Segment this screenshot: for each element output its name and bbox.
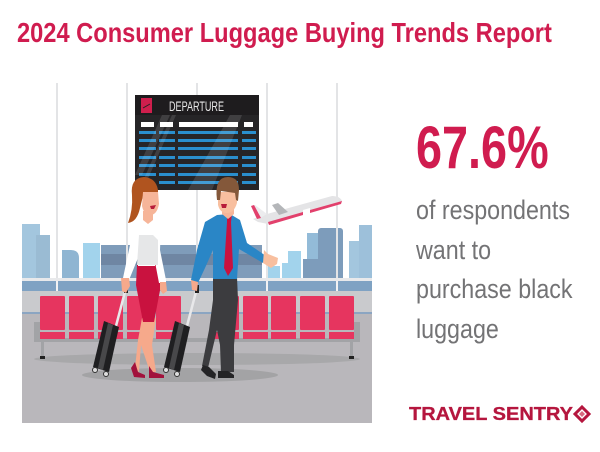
seat shadow <box>34 353 360 365</box>
man's suitcase <box>164 285 199 376</box>
description: purchase black <box>416 274 573 304</box>
description <box>416 195 573 344</box>
window frames <box>56 83 338 279</box>
airplane <box>251 196 342 225</box>
logo: Travel Sentry: TRAVEL SENTRY <box>409 403 574 424</box>
woman's suitcase <box>92 285 128 376</box>
departure board <box>135 95 259 190</box>
description: of respondents <box>416 195 570 225</box>
bench frame <box>34 322 360 359</box>
title: 2024 Consumer Luggage Buying Trends Report <box>17 17 552 48</box>
departure board: DEPARTURE <box>169 98 224 114</box>
statistic: 67.6% <box>416 114 549 181</box>
description: luggage <box>416 314 499 344</box>
woman <box>121 177 167 378</box>
lower wall and rail <box>22 278 372 314</box>
man <box>191 177 278 379</box>
skyline buildings <box>22 224 372 278</box>
seats <box>40 296 354 339</box>
person shadow <box>82 368 278 382</box>
floor <box>22 314 372 423</box>
description: want to <box>416 234 491 264</box>
